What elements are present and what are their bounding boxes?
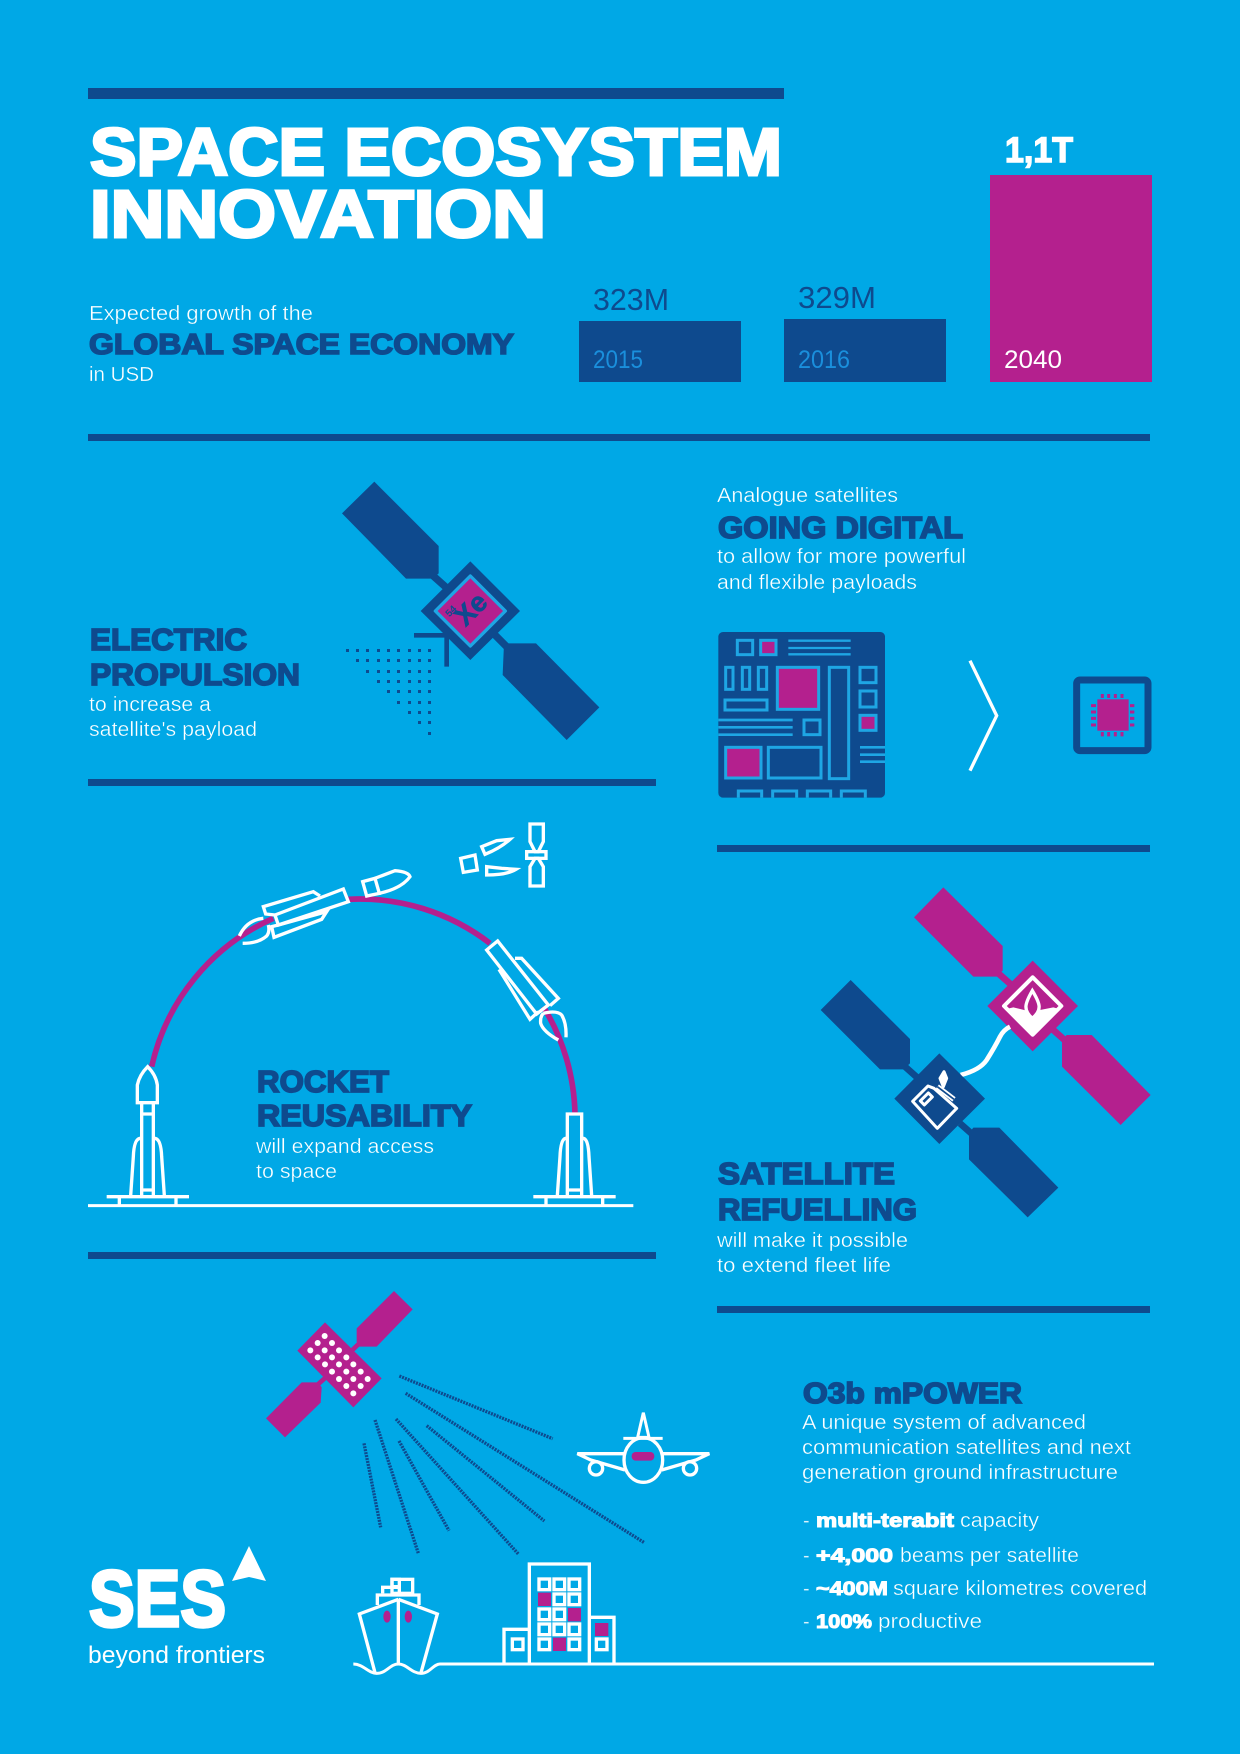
landed booster (533, 1114, 616, 1206)
illustration: satellite refuelling (821, 887, 1151, 1217)
feature list: beams per satellite (900, 1545, 1079, 1567)
heading block: going digital: and flexible payloads (717, 572, 917, 594)
subtitle: global space economy: in USD (89, 364, 154, 386)
illustration: O3b mPOWER beams (266, 1291, 709, 1554)
logo: SES beyond frontiers: beyond frontiers (88, 1642, 265, 1669)
deployed satellite and debris (461, 824, 546, 886)
heading block: satellite refuelling: SATELLITE (718, 1156, 895, 1191)
icon: digital chip (1077, 680, 1148, 751)
icons: ship, buildings and ground line (353, 1564, 1154, 1673)
heading block: rocket reusability: REUSABILITY (257, 1098, 472, 1133)
subtitle: global space economy (89, 303, 514, 386)
rocket on launch pad (107, 1067, 189, 1206)
separated fairing (363, 871, 410, 896)
illustration: rocket reusability (88, 824, 633, 1206)
heading block: electric propulsion (89, 622, 300, 741)
icon: magenta satellite (266, 1291, 413, 1437)
arrow: chevron (970, 661, 997, 771)
heading block: satellite refuelling: to extend fleet life (717, 1255, 891, 1277)
bar 2015: 2015 (593, 346, 643, 374)
feature list: 100% (816, 1612, 872, 1633)
heading block: O3b mPOWER: communication satellites and next (802, 1437, 1131, 1459)
heading block: rocket reusability: ROCKET (257, 1064, 389, 1099)
heading block: electric propulsion: to increase a (89, 694, 212, 716)
heading block: rocket reusability: will expand access (255, 1136, 434, 1158)
bar 2040: 2040 (1004, 346, 1062, 374)
icon: ship (359, 1579, 437, 1673)
heading block: going digital: GOING DIGITAL (718, 510, 963, 545)
feature list: productive (878, 1611, 982, 1633)
heading block: going digital (717, 485, 966, 594)
icon: electric propulsion satellite: 54 (444, 604, 460, 619)
bar 2040 (990, 131, 1152, 382)
heading block: satellite refuelling (716, 1156, 917, 1277)
subtitle: global space economy: Expected growth of the (89, 303, 313, 325)
heading block: going digital: to allow for more powerful (717, 546, 966, 568)
ground line and waves (353, 1664, 1154, 1673)
magenta tanker satellite (914, 887, 1151, 1125)
feature list (803, 1510, 1147, 1633)
bar 2016: 2016 (798, 346, 850, 374)
icon: fuel can (913, 1072, 957, 1128)
heading block: O3b mPOWER: generation ground infrastructure (802, 1462, 1118, 1484)
title: INNOVATION (90, 177, 546, 252)
feature list: - (803, 1611, 810, 1633)
feature list: - (803, 1578, 810, 1600)
heading block: satellite refuelling: will make it possible (716, 1230, 908, 1252)
feature list: ~400M (816, 1579, 888, 1600)
icon: electric propulsion satellite: Xe (448, 586, 494, 632)
dotted beams (364, 1376, 644, 1554)
bar 2015 (579, 282, 741, 382)
feature list: square kilometres covered (893, 1578, 1147, 1600)
feature list: multi-terabit (816, 1511, 955, 1532)
fuel hose (961, 1027, 1010, 1075)
rocket descending (487, 941, 566, 1040)
bar 2016: 329M (798, 280, 876, 315)
icon: buildings (504, 1564, 614, 1664)
navy client satellite (821, 980, 1058, 1217)
icon: airplane (577, 1413, 709, 1482)
heading block: electric propulsion: ELECTRIC (90, 622, 247, 657)
feature list: - (803, 1545, 810, 1567)
icon: analogue circuit board (718, 632, 885, 798)
icon: xenon thrust dots (346, 649, 431, 735)
heading block: rocket reusability: to space (256, 1161, 337, 1183)
bar 2040: 1,1T (1005, 131, 1073, 170)
subtitle: global space economy: GLOBAL SPACE ECONOMY (89, 329, 514, 361)
heading block: O3b mPOWER: A unique system of advanced (802, 1412, 1086, 1434)
feature list: - (803, 1510, 810, 1532)
trajectory arc (152, 899, 575, 1114)
icon: going digital circuit board to chip (718, 632, 1148, 798)
heading block: rocket reusability (255, 1064, 472, 1183)
feature list: +4,000 (816, 1546, 893, 1567)
heading block: electric propulsion: satellite's payload (89, 719, 257, 741)
heading block: going digital: Analogue satellites (717, 485, 898, 507)
logo: SES beyond frontiers: SES (89, 1554, 226, 1643)
icon: electric propulsion satellite (342, 482, 599, 740)
rocket ascending (239, 889, 348, 943)
bar 2015: 323M (593, 282, 669, 317)
heading block: satellite refuelling: REFUELLING (718, 1192, 917, 1227)
bar chart: space economy growth (579, 131, 1152, 382)
heading block: electric propulsion: PROPULSION (90, 657, 300, 692)
feature list: capacity (960, 1510, 1039, 1532)
bar 2016 (784, 280, 946, 382)
heading block: O3b mPOWER: O3b mPOWER (803, 1378, 1022, 1410)
title (90, 115, 782, 252)
heading block: O3b mPOWER (802, 1378, 1131, 1484)
title: SPACE ECOSYSTEM (90, 115, 782, 190)
logo: SES beyond frontiers (88, 1546, 266, 1669)
